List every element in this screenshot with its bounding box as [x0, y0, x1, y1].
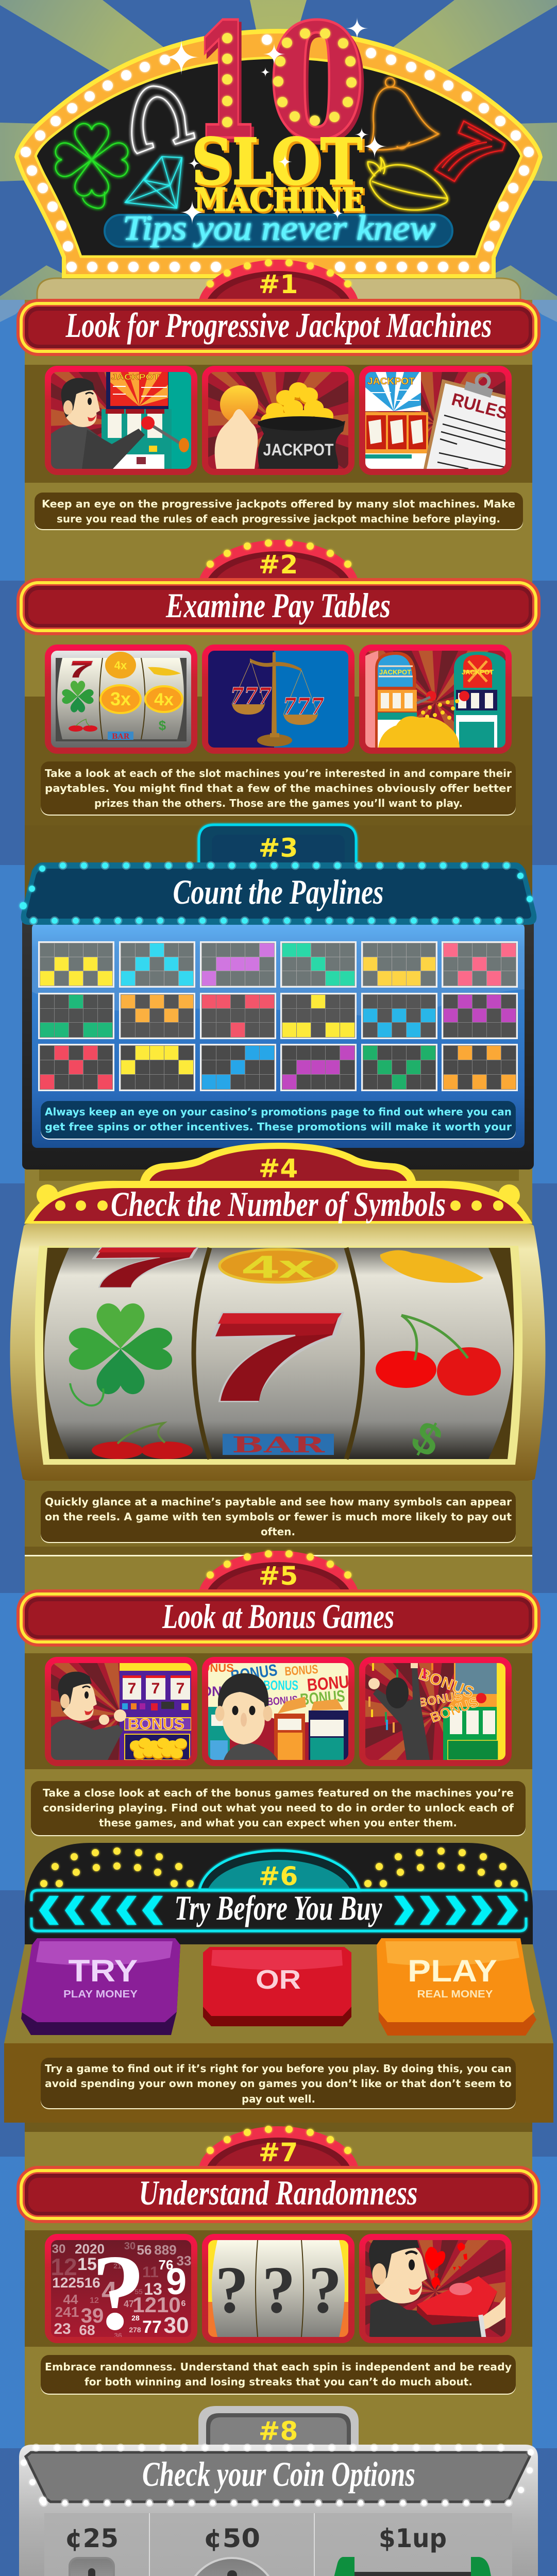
slot machine title: SLOT — [194, 127, 364, 201]
panel: man celebrating bonus: BONUS — [417, 1689, 463, 1710]
section 6 — [4, 1843, 553, 2123]
text block 7 — [41, 2355, 516, 2395]
neon horseshoe — [132, 86, 195, 154]
panel: rules clipboard — [360, 367, 515, 480]
panel: jackpot pot: JACKPOT — [263, 440, 334, 459]
coin options — [44, 2513, 512, 2576]
number 10: 1 — [197, 0, 261, 176]
panel: jackpot pot — [203, 367, 358, 480]
text block 4: on the reels. A game with ten symbols or fewer is much more likely to pay out — [45, 1511, 512, 1523]
button: play — [377, 1938, 536, 2036]
reel symbol: 4x coin: 4x — [242, 1249, 315, 1285]
heading: examine pay tables: Examine Pay Tables — [165, 586, 391, 625]
panel: random numbers: 30 — [124, 2241, 136, 2252]
panel: random numbers: 13 — [144, 2280, 162, 2298]
button deck — [4, 1944, 553, 2123]
panel: random numbers: 77 — [142, 2317, 162, 2337]
text block 2 — [41, 761, 516, 816]
paylines row 1 — [38, 941, 518, 988]
number badge 4: #4 — [259, 1154, 298, 1183]
text block 6: avoid spending your own money on games you don’t like or that don’t seem to — [45, 2077, 512, 2090]
panel: man with gift — [360, 2230, 515, 2348]
paylines row 2 — [38, 993, 518, 1039]
panel: bonus words: BONUS — [266, 1694, 298, 1708]
panel: reels with multipliers — [48, 648, 194, 751]
paylines row 3 — [38, 1044, 518, 1091]
text block 1: Keep an eye on the progressive jackpots offered by many slot machines. Make — [42, 498, 515, 510]
panel: man at bonus machine: 7 — [128, 1680, 136, 1697]
text block 2: paytables. You might find that a few of the machines obviously offer better — [45, 782, 512, 794]
panel: reels with multipliers: 4x — [114, 659, 127, 672]
coin label 50 cents: ¢50 — [204, 2523, 260, 2553]
panel: question mark reels: ? — [215, 2253, 248, 2327]
text block 3: get free spins or other incentives. These promotions will make it worth your — [45, 1121, 512, 1133]
panel: random numbers: 11 — [142, 2264, 159, 2281]
panel: random numbers: 1210 — [132, 2293, 181, 2317]
panel: reels with multipliers: BAR — [112, 733, 130, 741]
panel: bonus words: BONUS — [299, 1686, 346, 1709]
panel: random numbers: 30 — [52, 2242, 65, 2256]
panel: man at bonus machine: 7 — [151, 1680, 160, 1697]
silver panel — [19, 2445, 538, 2576]
panel: random numbers: 21 — [113, 2262, 122, 2270]
panel: man celebrating bonus: BONUS — [416, 1665, 477, 1702]
panel: man at bonus machine — [46, 1658, 200, 1771]
panel: bonus words — [201, 1660, 359, 1763]
number badge 1 — [199, 259, 358, 300]
panel: random numbers: 23 — [54, 2320, 71, 2337]
neon bell — [369, 78, 438, 150]
reel symbol: seven top — [94, 1248, 197, 1287]
panel: random numbers: 30 — [164, 2313, 189, 2338]
text block 1 — [35, 493, 523, 530]
panel: random numbers: 12 — [90, 2296, 99, 2305]
neon lucky seven — [435, 121, 505, 181]
heading: count the paylines: Count the Paylines — [173, 872, 383, 911]
panel: random numbers: 39 — [81, 2304, 104, 2327]
button: try — [21, 1938, 180, 2035]
slot reels — [10, 1224, 546, 1481]
reel symbol: BAR — [223, 1432, 334, 1458]
marquee sign — [14, 0, 543, 278]
button: try: PLAY MONEY — [63, 1989, 138, 2000]
panel: man at bonus machine: BONUS — [128, 1716, 184, 1733]
reel symbol: clover — [69, 1303, 172, 1405]
text block 2: prizes than the others. Those are the games you’ll want to play. — [94, 797, 463, 809]
reel symbol: 4x coin — [220, 1249, 337, 1285]
sparkles — [163, 17, 387, 225]
neon clover — [56, 124, 128, 208]
text block 3 — [41, 1101, 516, 1140]
text block 4: often. — [261, 1526, 295, 1538]
text block 2: Take a look at each of the slot machines you’re interested in and compare their — [45, 767, 512, 779]
coin slot small — [70, 2558, 114, 2576]
heading: try before you buy: Try Before You Buy — [174, 1888, 382, 1927]
text block 6: Try a game to find out if it’s right for you before you play. By doing this, you can — [45, 2062, 512, 2075]
heading: look at bonus games — [16, 1589, 541, 1647]
panel: random numbers: 6 — [181, 2299, 186, 2308]
heading: check your coin options: Check your Coin Options — [142, 2454, 415, 2494]
panel: bonus words: BONUS — [263, 1677, 298, 1693]
panel: man at bonus machine: 7 — [176, 1680, 184, 1697]
number badge 6: #6 — [259, 1861, 298, 1891]
panel: balance scale: 777 — [230, 683, 272, 709]
button: play: REAL MONEY — [417, 1989, 493, 2000]
heading: look for progressive jackpot machines — [16, 299, 541, 356]
section 7 — [16, 2126, 541, 2395]
reel symbol: cherries right — [376, 1315, 501, 1396]
panel: reels with multipliers: 4x — [154, 690, 174, 709]
button: or: OR — [256, 1965, 301, 1995]
panel: man at machine: JACKPOT — [111, 373, 160, 382]
text block 1: sure you read the rules of each progressive jackpot machine before playing. — [57, 513, 500, 525]
section 4 — [10, 1143, 546, 1543]
panel: random numbers: ? — [92, 2233, 145, 2352]
heading: understand randomness: Understand Randomness — [139, 2173, 417, 2212]
panel: random numbers: 12 — [50, 2253, 77, 2280]
panel: reels with multipliers: 3x — [110, 688, 131, 709]
section 8 — [19, 2406, 538, 2576]
panel: random numbers: 47 — [124, 2299, 134, 2309]
panel: random numbers: 36 — [114, 2331, 122, 2340]
bill acceptor — [330, 2557, 512, 2576]
tips subtitle: Tips you never knew — [123, 208, 435, 247]
slot machine title: SLOT — [192, 125, 362, 199]
panel: rules clipboard: RULES — [449, 389, 510, 423]
number badge 5: #5 — [259, 1561, 298, 1591]
text block 4 — [41, 1491, 516, 1543]
text block 6 — [41, 2058, 516, 2109]
neon diamond — [125, 157, 182, 208]
text block 7: for both winning and losing streaks that you can’t do much about. — [85, 2376, 472, 2388]
panel: random numbers: 15 — [77, 2255, 97, 2274]
heading: check the number of symbols: Check the Number of Symbols — [111, 1184, 446, 1224]
panel: question mark reels — [205, 2237, 351, 2340]
panel: rules clipboard: JACKPOT — [367, 376, 415, 386]
black marquee header — [25, 1843, 533, 1944]
sign light bulbs — [21, 35, 534, 272]
payline panel — [22, 918, 534, 1170]
section 3 — [0, 825, 557, 2576]
panel: random numbers: 278 — [129, 2326, 141, 2334]
panel: two machines and coins: JACKPOT — [379, 668, 411, 676]
panel: balance scale: 777 — [283, 693, 324, 720]
panel: random numbers: 56 — [137, 2242, 151, 2258]
panel: random numbers: 76 — [159, 2257, 173, 2273]
neon lemon — [368, 157, 447, 210]
reel symbol: BAR: BAR — [232, 1432, 326, 1458]
panel: two machines and coins — [360, 646, 515, 759]
panel: random numbers: 241 — [55, 2304, 79, 2320]
panel: random numbers: 68 — [79, 2322, 95, 2338]
panel: random numbers: 33 — [177, 2253, 191, 2268]
panel: reels with multipliers: $ — [159, 718, 166, 733]
panel: random numbers: 28 — [131, 2314, 140, 2322]
panel: question mark reels: ? — [308, 2253, 342, 2327]
number badge 3: #3 — [259, 833, 298, 863]
panel: balance scale — [205, 648, 351, 751]
number badge 3 — [199, 825, 356, 868]
reel symbol: seven centre — [213, 1313, 342, 1401]
coin slot round — [186, 2558, 278, 2576]
text block 5: considering playing. Find out what you need to do in order to unlock each of — [43, 1802, 514, 1814]
number 10 — [195, 0, 367, 176]
section 1 — [16, 259, 541, 530]
reel drum — [44, 1248, 513, 1459]
panel: random numbers: 889 — [154, 2242, 177, 2258]
button: play: PLAY — [408, 1954, 497, 1988]
reel symbol: cherries bottom — [92, 1423, 193, 1459]
panel: random numbers: 55 — [134, 2287, 143, 2296]
heading: try before you buy — [31, 1888, 526, 1931]
number badge 8 — [198, 2406, 359, 2447]
panel: man at machine — [46, 367, 200, 480]
coin label 25 cents: ¢25 — [65, 2523, 119, 2553]
panel: question mark reels: ? — [262, 2253, 296, 2327]
number badge 4 — [140, 1143, 416, 1183]
panel: random numbers: 44 — [63, 2292, 78, 2307]
reel symbol: dollar: $ — [403, 1410, 451, 1467]
text block 7: Embrace randomness. Understand that each spin is independent and be ready — [45, 2361, 512, 2373]
sign frame — [14, 29, 543, 278]
text block 5: these games, and what you can expect when you enter them. — [99, 1817, 457, 1829]
text block 5 — [31, 1781, 526, 1836]
panel: bonus words: ONUS — [201, 1684, 241, 1699]
heading: understand randomness — [16, 2166, 541, 2223]
number badge 2: #2 — [259, 550, 298, 580]
number badge 8: #8 — [259, 2416, 298, 2446]
panel: man celebrating bonus — [360, 1658, 515, 1771]
panel: random numbers: 122516 — [52, 2275, 100, 2291]
slot machine title: MACHINE — [195, 182, 366, 220]
section 5 — [16, 1550, 541, 1836]
number badge 1: #1 — [259, 269, 298, 299]
coin label one dollar: $1up — [379, 2523, 447, 2553]
text block 5: Take a close look at each of the bonus games featured on the machines you’re — [43, 1787, 514, 1799]
number badge 5 — [199, 1550, 358, 1591]
gold reel frame — [10, 1224, 546, 1481]
heading: count the paylines — [20, 862, 536, 925]
button: try: TRY — [68, 1954, 138, 1988]
panel: random numbers: 4 — [102, 2276, 117, 2307]
section 2 — [16, 539, 541, 816]
heading: examine pay tables — [16, 578, 541, 635]
panel: man celebrating bonus: BONUS — [428, 1694, 481, 1726]
panel: random numbers: 9 — [166, 2261, 187, 2302]
panel: bonus words: BONUS — [284, 1663, 318, 1679]
reel symbol: lemon — [380, 1250, 483, 1283]
heading: check your coin options — [21, 2448, 534, 2504]
number badge 7: #7 — [259, 2138, 298, 2167]
panel: bonus words: ONUS — [201, 1662, 234, 1674]
panel: two machines and coins: JACKPOT — [462, 668, 494, 676]
text block 6: pay out well. — [242, 2093, 315, 2105]
text block 3: Always keep an eye on your casino’s promotions page to find out where you can — [45, 1106, 512, 1118]
panel: random numbers: 2020 — [75, 2241, 105, 2257]
button: or — [203, 1947, 351, 2026]
number 10: 0 — [272, 0, 367, 176]
number badge 2 — [199, 539, 358, 580]
number badge 6 — [199, 1851, 359, 1891]
slot machine title: MACHINE — [194, 181, 364, 218]
text block 4: Quickly glance at a machine’s paytable and see how many symbols can appear — [45, 1496, 512, 1508]
heading: look at bonus games: Look at Bonus Games — [162, 1597, 394, 1636]
number badge 7 — [199, 2126, 358, 2167]
panel: random numbers — [48, 2233, 194, 2352]
